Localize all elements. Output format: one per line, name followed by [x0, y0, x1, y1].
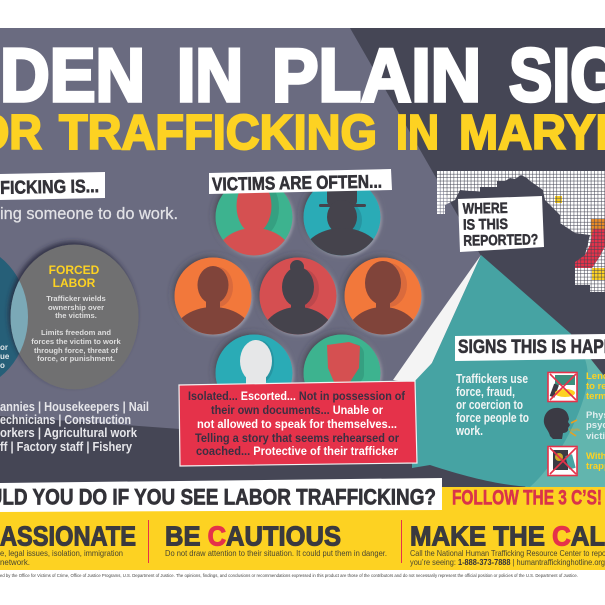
title line 2	[0, 105, 605, 160]
portrait: woman on orange	[341, 254, 424, 338]
icon: crossed-out money	[548, 372, 577, 402]
left circle text fragments: or	[0, 343, 8, 352]
trafficker text: Traffickers use	[456, 372, 528, 386]
title line 1	[0, 33, 605, 117]
title line 1: IN	[177, 33, 243, 117]
callout: victim indicators: their own documents... Unable or	[211, 403, 383, 417]
divider	[401, 520, 402, 563]
forced labor heading: FORCED	[49, 263, 100, 277]
heading tag: victims are often: VICTIMS ARE OFTEN...	[212, 171, 382, 195]
yellow action band	[0, 487, 605, 570]
portrait: woman on green	[212, 192, 296, 258]
definition sentence: ing someone to do work.	[0, 204, 178, 223]
background: white beam	[393, 255, 481, 384]
venn diagram	[0, 244, 138, 390]
portrait: man with hat on teal	[300, 190, 384, 258]
trafficker text: force, fraud,	[456, 385, 515, 399]
forced labor text: force, or punishment.	[37, 354, 115, 363]
occupation list	[0, 400, 149, 454]
callout: victim indicators: Isolated... Escorted... Not in possession of	[188, 389, 406, 403]
forced labor text: ownership over	[48, 303, 104, 312]
step: be compassionate: network.	[0, 557, 30, 567]
footer disclaimer: ed by the Office for Victims of Crime, Office of Justice Programs, U.S. Department of Justice. The opinions, findings, and conclusions or recommendations expressed in this product are those of the contributors and do not necessarily represent the official position or policies of the U.S. Department of Justice.	[0, 573, 578, 578]
forced labor text: Trafficker wields	[46, 294, 106, 303]
venn overlap	[10, 280, 28, 354]
panel: left teal circle	[0, 244, 28, 390]
signs text column	[586, 371, 605, 472]
occupation list: ff | Factory staff | Fishery	[0, 440, 132, 454]
step: be compassionate: ASSIONATE	[0, 520, 136, 552]
background: gray panel	[0, 28, 605, 488]
title line 2: TRAFFICKING	[59, 105, 377, 160]
callout: where is this reported: WHERE	[463, 200, 508, 218]
callout: where is this reported	[458, 196, 544, 252]
forced labor text: the victims.	[55, 311, 97, 320]
forced labor heading	[49, 263, 100, 290]
forced labor text: Limits freedom and	[41, 328, 111, 337]
title line 2: IN	[396, 105, 439, 160]
occupation list: annies | Housekeepers | Nail	[0, 400, 149, 414]
callout: where is this reported: REPORTED?	[463, 231, 538, 250]
map: orange area	[591, 219, 605, 236]
portrait: flat-top figure on green	[300, 331, 384, 382]
occupation list: echnicians | Construction	[0, 413, 131, 427]
step: be cautious	[165, 520, 387, 558]
trafficker text	[455, 372, 529, 438]
forced labor heading: LABOR	[53, 276, 96, 290]
occupation list: orkers | Agricultural work	[0, 426, 137, 440]
callout: victim indicators: Telling a story that seems rehearsed or	[195, 431, 399, 445]
signs text column: victi	[586, 431, 605, 442]
title line 1: PLAIN	[272, 33, 481, 117]
callout: victim indicators: not allowed to speak for themselves...	[197, 417, 397, 431]
victim portrait circles	[171, 190, 424, 384]
trafficker text: work.	[455, 424, 483, 438]
callout: where is this reported: IS THIS	[463, 216, 508, 234]
portrait: woman with bun on red	[256, 254, 339, 338]
forced labor text	[31, 294, 122, 363]
background: teal beam	[412, 255, 588, 487]
question banner	[0, 478, 442, 512]
trafficker text: force people to	[456, 411, 529, 425]
map: small yellow marker	[555, 196, 562, 203]
step: be cautious: BE CAUTIOUS	[165, 520, 341, 552]
map: red area	[575, 229, 605, 268]
panel: forced labor circle	[10, 244, 138, 390]
step: be compassionate	[0, 520, 136, 567]
callout: victim indicators	[179, 381, 417, 466]
background: light teal shape	[525, 333, 605, 488]
forced labor text: forces the victim to work	[31, 337, 122, 346]
dot map	[437, 171, 605, 292]
divider	[148, 520, 149, 563]
step: make the call	[410, 520, 605, 567]
left circle text fragments: o	[0, 361, 5, 370]
left circle text fragments: ue	[0, 352, 10, 361]
icon: speaking head	[544, 408, 580, 439]
portrait: man on orange	[171, 254, 254, 338]
callout: victim indicators: coached... Protective of their trafficker	[196, 444, 398, 458]
forced labor text: through force, threat of	[34, 346, 118, 355]
trafficker text: or coercion to	[456, 398, 523, 412]
left circle text fragments	[0, 276, 10, 370]
portrait: light figure on teal	[212, 331, 296, 384]
map: yellow area	[592, 268, 605, 280]
step: be compassionate: e, legal issues, isolation, immigration	[0, 548, 123, 558]
background: dark angular panel	[0, 28, 605, 490]
icon: speaking head: !@#%	[569, 427, 580, 432]
icon: crossed-out passport	[548, 446, 577, 476]
step: be cautious: Do not draw attention to their situation. It could put them in danger.	[165, 548, 387, 558]
